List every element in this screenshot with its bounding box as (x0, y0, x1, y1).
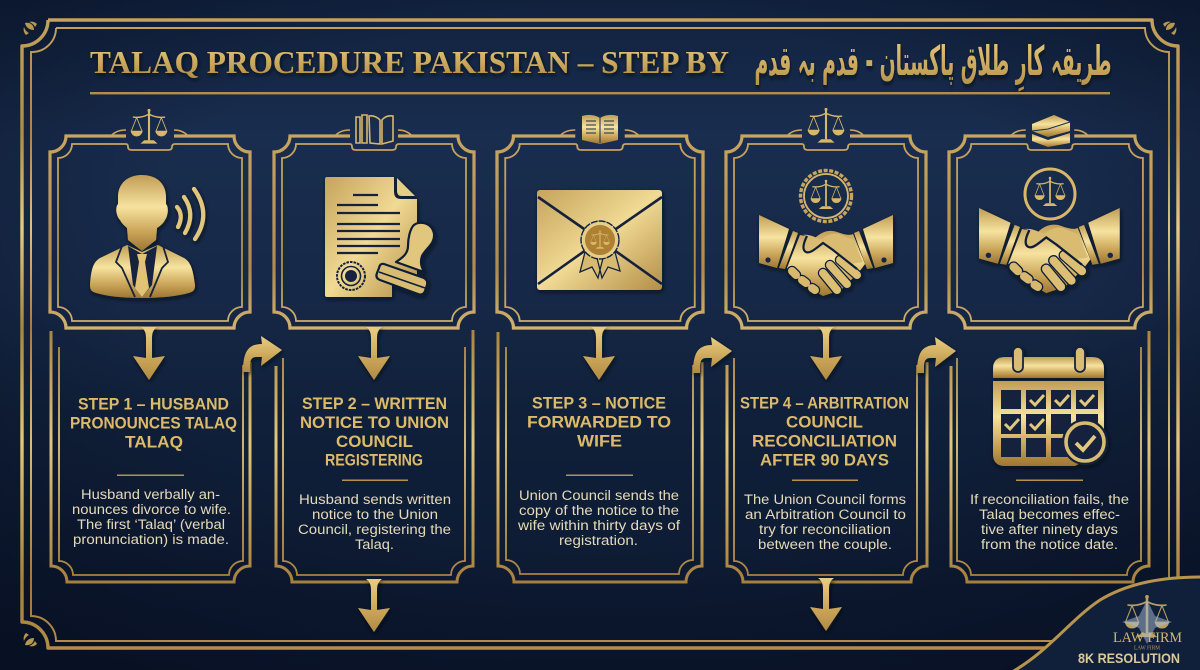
icon: scales of justice (807, 108, 845, 143)
description (744, 492, 906, 552)
heading: STEP 2 – WRITTEN (302, 394, 447, 413)
description: Husband sends written (299, 492, 451, 507)
arrow: step 1 down (133, 327, 165, 380)
title underline (90, 92, 1110, 94)
icon: open book (582, 115, 618, 144)
panel: step 5 icon card (949, 115, 1151, 328)
badge sub-name: LAW FIRM (1134, 646, 1161, 652)
badge resolution: 8K RESOLUTION (1078, 650, 1180, 666)
description: nounces divorce to wife. (72, 502, 231, 517)
panel: step 1 text (51, 331, 250, 582)
arrow: step 1 to step 2 (243, 336, 282, 372)
arrow: step 3 down (583, 327, 615, 380)
description: The Union Council forms (744, 492, 906, 507)
description: Talaq. (355, 537, 394, 552)
description: try for reconciliation (759, 522, 891, 537)
heading: FORWARDED TO (527, 412, 671, 432)
icon: handshake (759, 215, 893, 296)
arrow: step 4 bottom (810, 578, 842, 631)
description: tive after ninety days (981, 522, 1118, 537)
icon: sealed envelope (537, 190, 662, 290)
icon: handshake (979, 208, 1120, 293)
heading: STEP 4 – ARBITRATION (740, 394, 909, 412)
description: Husband verbally an- (81, 487, 220, 502)
panel: step 3 icon card (497, 115, 703, 328)
heading (300, 394, 449, 470)
description (72, 487, 231, 547)
title: Urdu: طریقہ کارِ طلاق پاکستان - قدم بہ قدم (754, 39, 1112, 92)
icon: calendar (993, 347, 1108, 466)
description: notice to the Union (312, 507, 438, 522)
panel: step 2 icon card (274, 115, 474, 328)
title: English: TALAQ PROCEDURE PAKISTAN – STEP BY (90, 44, 729, 80)
description: Talaq becomes effec- (979, 507, 1120, 522)
heading (70, 394, 237, 452)
icon: scales ring (1025, 169, 1075, 219)
panel: step 1 icon card (50, 109, 250, 328)
heading: WIFE (577, 432, 622, 450)
description: Council, registering the (298, 522, 451, 537)
heading: REGISTERING (325, 450, 423, 470)
description: from the notice date. (981, 537, 1118, 552)
arrow: step 3 to step 4 (693, 337, 732, 373)
panel: step 4 icon card (726, 108, 926, 328)
description: Union Council sends the (519, 488, 679, 503)
heading: AFTER 90 DAYS (760, 450, 889, 470)
panel: step 3 text (498, 332, 702, 582)
description: pronunciation) is made. (73, 532, 229, 547)
arrow: step 2 bottom (358, 579, 390, 632)
description: registration. (559, 533, 638, 548)
arrow: step 4 to step 5 (917, 337, 956, 373)
heading (527, 394, 671, 450)
icon: document with stamp and seal (325, 177, 434, 297)
description: an Arbitration Council to (745, 507, 906, 522)
heading: PRONOUNCES TALAQ (70, 414, 237, 432)
law firm badge (1012, 577, 1200, 670)
icon: scales of justice (130, 109, 168, 144)
description (517, 488, 680, 548)
heading: RECONCILIATION (752, 432, 897, 450)
heading: COUNCIL (786, 412, 863, 432)
arrow: step 4 down (810, 327, 842, 380)
panel: step 2 text (276, 330, 473, 582)
description: If reconciliation fails, the (970, 492, 1129, 507)
icon: open book with binder (356, 115, 393, 144)
description: copy of the notice to the (519, 503, 679, 518)
badge firm name: LAW FIRM (1113, 630, 1182, 646)
description: The first ‘Talaq’ (verbal (77, 517, 225, 532)
arrow: step 2 down (358, 327, 390, 380)
description: wife within thirty days of (517, 518, 680, 533)
heading: STEP 1 – HUSBAND (78, 394, 229, 414)
icon: stack of books (1032, 115, 1070, 147)
icon: scales seal (800, 170, 852, 222)
icon: speaking man (90, 175, 203, 298)
description (298, 492, 451, 552)
heading: TALAQ (125, 432, 183, 452)
description: between the couple. (758, 537, 892, 552)
panel: step 4 text (727, 358, 927, 582)
heading: STEP 3 – NOTICE (532, 394, 666, 412)
badge logo: scales (1125, 595, 1169, 637)
badge star (1122, 600, 1172, 644)
description (970, 492, 1129, 552)
heading (740, 394, 909, 470)
heading: COUNCIL (336, 432, 413, 451)
heading: NOTICE TO UNION (300, 413, 449, 432)
panel: step 5 text (951, 331, 1149, 582)
